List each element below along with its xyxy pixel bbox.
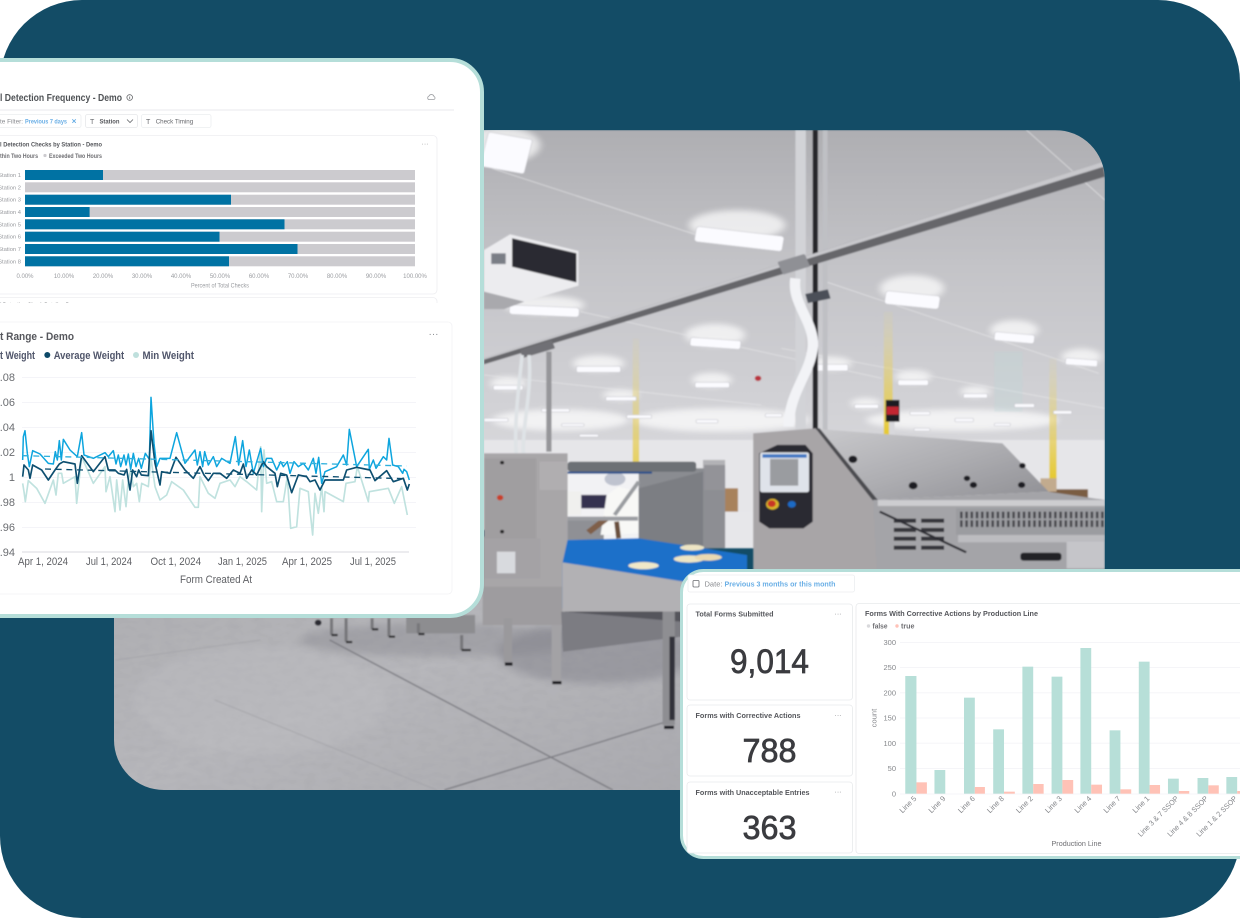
x axis labels — [18, 556, 396, 568]
photo: background boxes — [568, 472, 1088, 548]
photo: concrete floor — [100, 537, 700, 793]
bars: true series — [916, 780, 1240, 794]
x axis labels: Line 4 & 8 SSOP — [1165, 794, 1210, 839]
photo: worker — [578, 472, 626, 540]
photo: ceiling heater unit — [484, 234, 578, 309]
filter: date: Previous 7 days — [25, 118, 67, 126]
filter: date: te Filter: — [0, 118, 23, 126]
card: forms with corrective actions: Forms with Corrective Actions — [696, 711, 800, 720]
percent axis labels: 0.00% — [16, 274, 34, 280]
filter: date range — [688, 575, 854, 592]
x axis labels: Line 7 — [1102, 794, 1122, 815]
percent axis labels: 40.00% — [171, 274, 192, 280]
percent axis labels: 50.00% — [210, 274, 231, 280]
percent axis labels: 80.00% — [327, 274, 348, 280]
bars — [25, 170, 415, 266]
x axis labels: Line 1 & 2 SSOP — [1194, 794, 1239, 839]
filter: check timing: T — [146, 119, 151, 126]
card: forms with corrective actions: 788 — [742, 732, 796, 769]
x axis labels: Apr 1, 2025 — [282, 556, 332, 568]
panel: stacked bar chart by station: ··· — [422, 141, 428, 148]
legend: false — [872, 624, 888, 630]
photo: left machine and roller — [484, 453, 725, 587]
card: forms with unacceptable entries: 363 — [742, 809, 796, 846]
photo: blue conveyor — [562, 538, 747, 612]
panel: stacked bar chart by station — [0, 136, 437, 294]
chart title: l Detection Checks by Station - Demo — [0, 142, 102, 148]
legend: thin Two Hours — [0, 154, 39, 160]
panel: weight range line chart: ··· — [428, 329, 438, 340]
y axis labels: 300 — [883, 638, 896, 647]
legend — [0, 351, 194, 362]
photo: vertical conduits — [795, 130, 831, 430]
chart title: t Range - Demo — [0, 331, 74, 343]
panel: bottom-right dashboard — [682, 570, 1240, 858]
y axis labels: 1 — [9, 472, 15, 484]
bars — [905, 648, 1240, 794]
icon: info — [127, 95, 132, 100]
line series — [23, 397, 409, 535]
axis title: Percent of Total Checks — [191, 284, 249, 290]
y axis labels — [0, 372, 15, 559]
x axis labels: Jul 1, 2024 — [86, 556, 132, 568]
photo: machine control panel — [759, 445, 813, 528]
photo: central machine body — [752, 427, 1105, 569]
x axis labels: Jul 1, 2025 — [350, 556, 396, 568]
card: forms with unacceptable entries: ··· — [834, 789, 842, 796]
x axis labels: Oct 1, 2024 — [150, 556, 201, 568]
x axis title: Production Line — [1052, 839, 1102, 848]
x axis labels: Line 6 — [956, 794, 977, 815]
y axis labels: 250 — [883, 663, 896, 672]
legend: Min Weight — [142, 350, 194, 362]
legend: Exceeded Two Hours — [49, 154, 103, 160]
y axis labels — [883, 638, 896, 798]
x axis labels: Apr 1, 2024 — [18, 556, 68, 568]
percent axis labels: 60.00% — [249, 274, 270, 280]
x axis labels: Line 3 & 7 SSOP — [1136, 794, 1180, 839]
panel: production line bar chart — [856, 604, 1240, 854]
filter: date — [0, 114, 81, 128]
chart title: Forms With Corrective Actions by Production Line — [865, 609, 1038, 618]
x axis labels: Line 4 — [1073, 794, 1093, 815]
photo: white hose — [789, 278, 813, 427]
legend: Average Weight — [54, 350, 124, 362]
panel: left dashboard — [0, 60, 482, 616]
photo: production floor — [100, 127, 1105, 793]
filter: check timing: Check Timing — [156, 118, 194, 126]
photo: signal light — [755, 376, 899, 437]
percent axis labels: 100.00% — [403, 274, 428, 280]
percent axis labels: 30.00% — [132, 274, 153, 280]
x axis title: Form Created At — [180, 574, 252, 586]
card: forms with corrective actions — [687, 705, 852, 776]
y axis labels: 200 — [883, 688, 896, 698]
legend — [0, 154, 102, 158]
x axis labels: Line 9 — [927, 794, 947, 815]
card: total forms submitted — [687, 604, 852, 700]
filter: date range: Date: — [704, 580, 722, 588]
bars: false series — [905, 648, 1237, 794]
photo: ceiling — [484, 130, 1105, 531]
card: forms with corrective actions: ··· — [834, 712, 842, 720]
percent axis labels — [16, 274, 427, 278]
y axis labels: 100 — [883, 739, 896, 748]
x axis labels: Line 3 — [1043, 794, 1064, 815]
series: min weight — [23, 447, 407, 535]
filter: station — [86, 114, 138, 128]
photo: ceiling lights — [480, 132, 1098, 437]
photo: far wall — [484, 440, 1105, 540]
photo: ceiling panel seams — [493, 130, 1105, 370]
percent axis labels: 90.00% — [366, 274, 387, 280]
x axis labels: Line 1 — [1131, 794, 1151, 815]
legend: t Weight — [0, 350, 35, 362]
card: total forms submitted: 9,014 — [730, 643, 809, 681]
x axis labels: Jan 1, 2025 — [218, 556, 267, 568]
trend: max dashed — [23, 456, 407, 466]
grid lines — [22, 378, 416, 552]
grid lines — [900, 642, 1240, 794]
percent axis labels: 20.00% — [93, 274, 114, 280]
card: forms with unacceptable entries: Forms with Unacceptable Entries — [696, 788, 810, 797]
x axis labels: Line 8 — [985, 794, 1006, 815]
series: max weight — [23, 397, 409, 483]
filter: date range: Previous 3 months or this month — [724, 580, 836, 588]
filter: station: Station — [100, 118, 120, 126]
y axis labels: 150 — [883, 714, 896, 722]
y axis title: count — [870, 708, 878, 727]
legend: true — [901, 624, 915, 630]
filter: check timing — [142, 114, 211, 128]
filter: station: T — [90, 119, 95, 126]
station labels — [0, 173, 22, 265]
percent axis labels: 70.00% — [288, 274, 309, 280]
panel: weight range line chart — [0, 322, 452, 594]
y axis labels: 50 — [888, 764, 896, 773]
x axis labels: Line 2 — [1014, 794, 1035, 815]
photo: yellow columns — [633, 312, 1057, 495]
photo: ceiling light glows — [460, 127, 1102, 432]
x axis labels: Line 5 — [898, 794, 918, 815]
cut-off detail table title: l Detection Check Details - Demo — [0, 302, 80, 309]
icon: cloud — [428, 95, 435, 100]
series: average weight — [23, 431, 409, 493]
x axis labels — [898, 794, 1239, 839]
card: total forms submitted: Total Forms Submitted — [696, 610, 774, 618]
photo: upper scene — [460, 127, 1105, 612]
percent axis labels: 10.00% — [54, 274, 75, 280]
card: forms with unacceptable entries — [687, 782, 852, 853]
heading: detection frequency: l Detection Frequency - Demo — [0, 93, 122, 104]
y axis labels: 0 — [892, 790, 896, 798]
photo: diagonal overhead pipe — [484, 162, 1105, 453]
legend — [867, 624, 915, 630]
trend: average dashed — [45, 469, 405, 479]
card: total forms submitted: ··· — [834, 611, 842, 618]
